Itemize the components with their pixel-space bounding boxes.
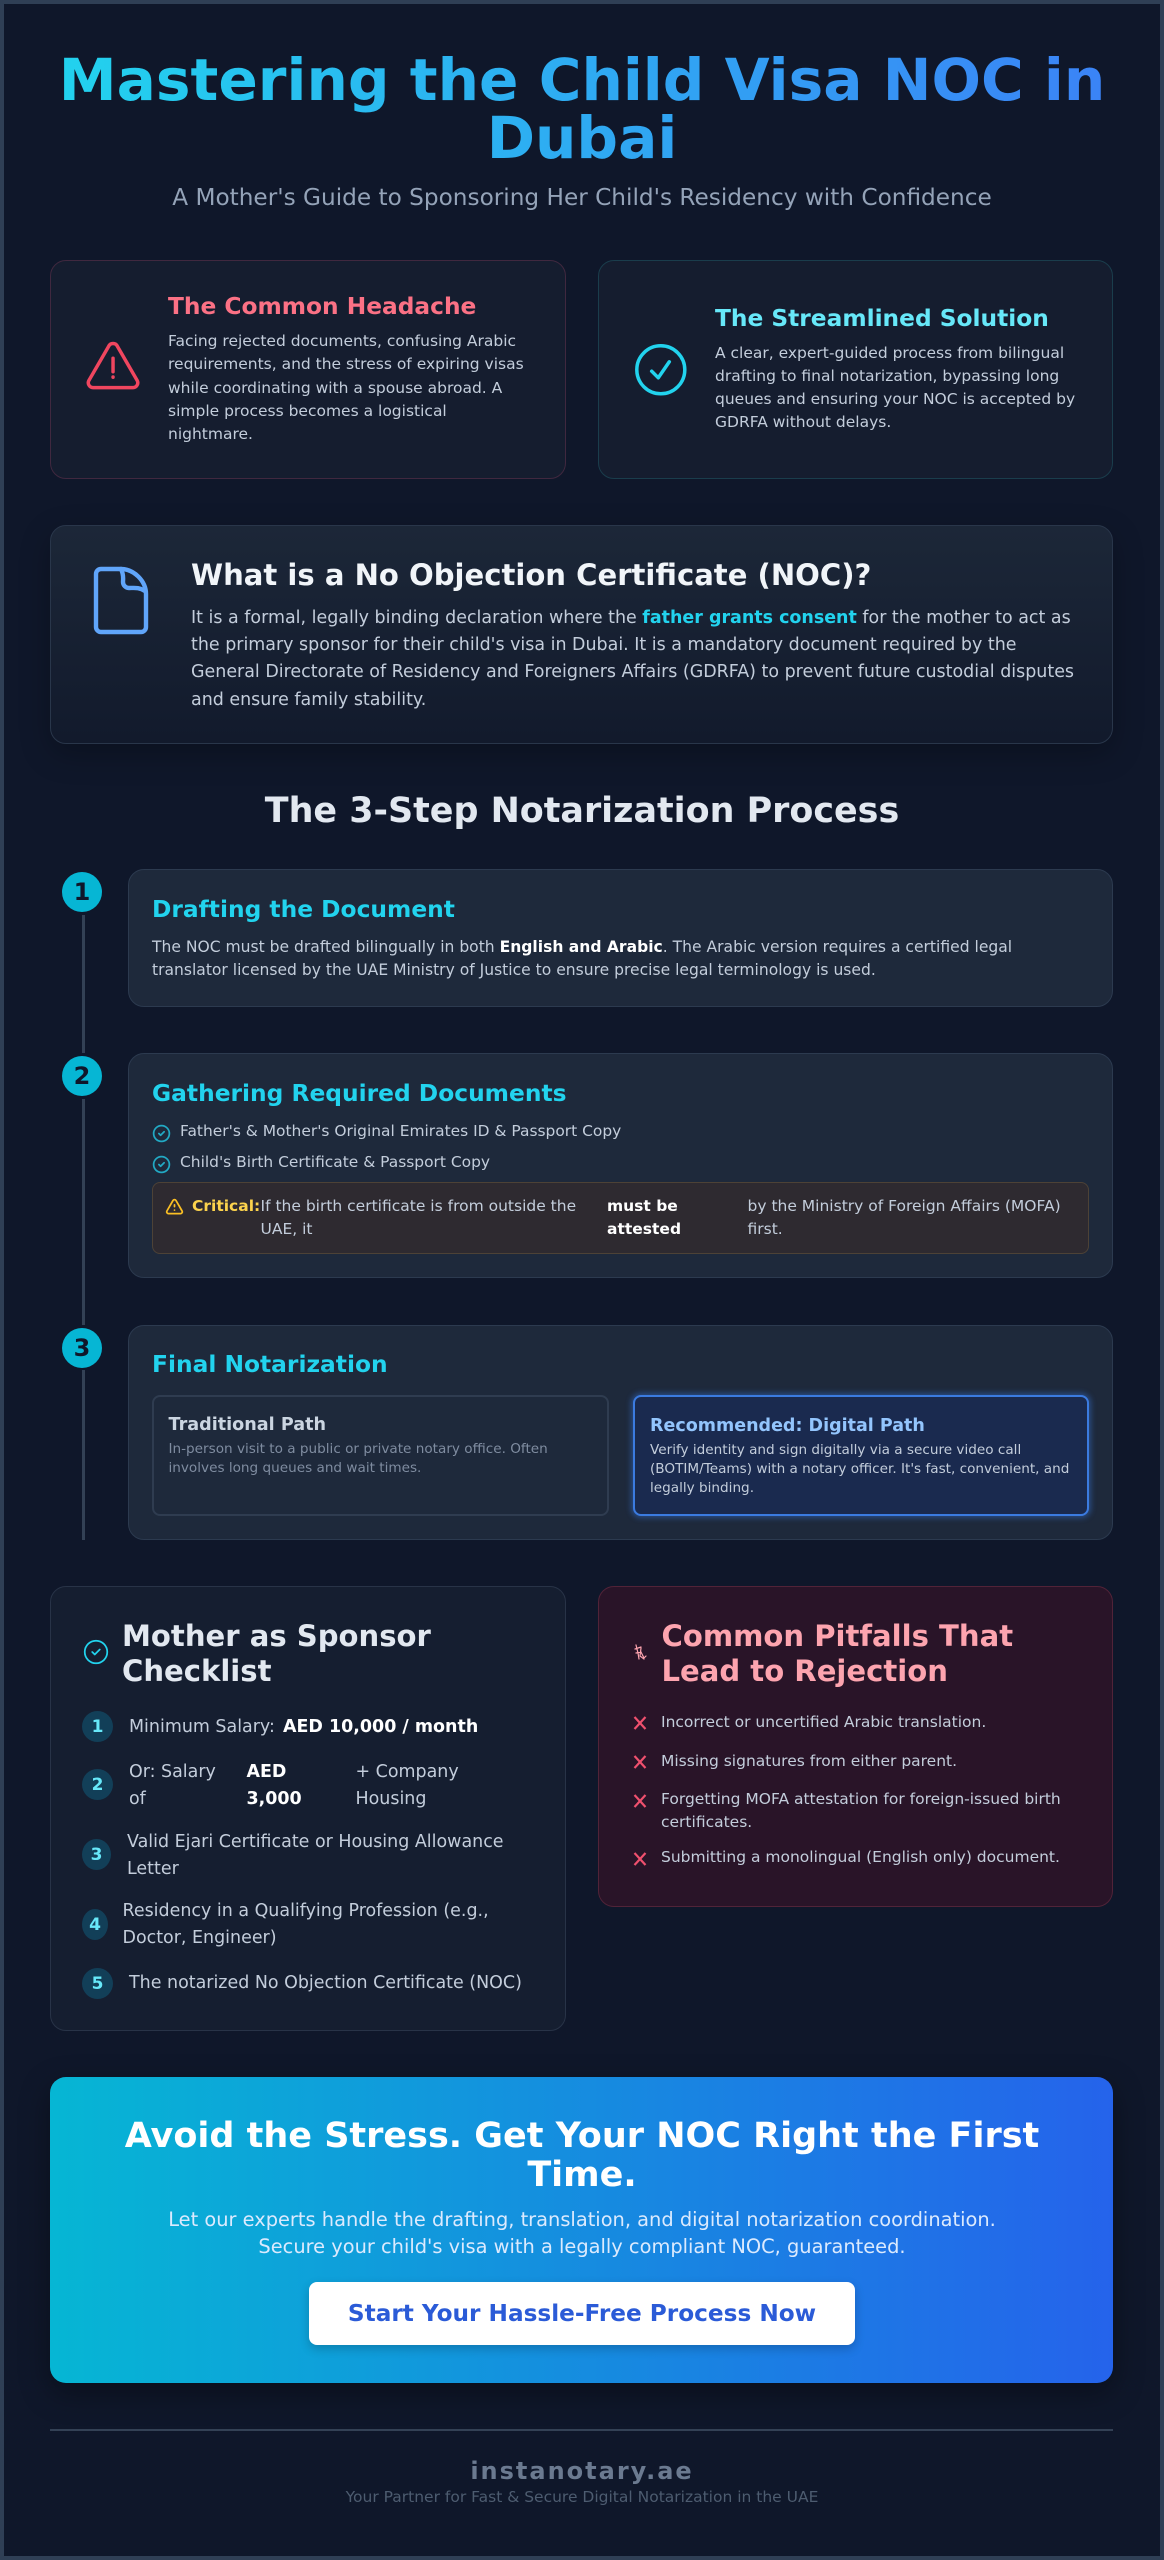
checklist item 4 (82, 1900, 489, 1948)
critical text part 1 (260, 1196, 576, 1238)
solution text: drafting to final notarization, bypassing long (715, 367, 1059, 385)
traditional heading: Traditional Path (168, 1415, 326, 1435)
checklist item 2: + Company (356, 1762, 459, 1782)
timeline line (82, 1370, 85, 1540)
step 2 number: 2 (74, 1062, 90, 1090)
CTA button (309, 2282, 855, 2345)
solution text: queues and ensuring your NOC is accepted by (715, 390, 1075, 408)
panel: digital path (633, 1395, 1089, 1516)
digital text (650, 1442, 1069, 1496)
critical text part 2 (607, 1196, 681, 1238)
checklist heading: Checklist (122, 1654, 271, 1688)
icon: check 2 (152, 1156, 170, 1174)
checklist item 3: Valid Ejari Certificate or Housing Allowance (127, 1832, 504, 1852)
CTA text: Let our experts handle the drafting, translation, and digital notarization coordination. (168, 2208, 996, 2230)
icon: warning triangle (86, 342, 140, 390)
CTA button: Start Your Hassle-Free Process Now (348, 2300, 816, 2327)
timeline line (82, 915, 85, 1053)
checklist item 2 (82, 1762, 459, 1808)
step 2 number (62, 1056, 102, 1096)
panel: common headache (50, 260, 566, 479)
checklist item 2: Or: Salary (129, 1762, 216, 1782)
pitfall 1: Incorrect or uncertified Arabic translation. (661, 1713, 986, 1731)
checklist heading: Mother as Sponsor (122, 1619, 431, 1653)
pitfall 3 (634, 1790, 1061, 1831)
pitfalls heading (662, 1619, 1013, 1688)
panel: streamlined solution (598, 260, 1113, 479)
solution text: GDRFA without delays. (715, 413, 891, 431)
critical text part 1: If the birth certificate is from outside the (260, 1196, 576, 1214)
footer brand: instanotary.ae (470, 2457, 694, 2485)
checklist item 2: 3,000 (246, 1788, 302, 1808)
checklist heading (122, 1619, 431, 1688)
NOC text: the primary sponsor for their child's visa in Dubai. It is a mandatory document required by the (191, 635, 1017, 655)
traditional text: involves long queues and wait times. (168, 1460, 421, 1476)
solution text: A clear, expert-guided process from bilingual (715, 344, 1064, 362)
headache heading: The Common Headache (168, 293, 476, 320)
checklist item 3 (82, 1832, 504, 1878)
digital text: Verify identity and sign digitally via a secure video call (650, 1442, 1021, 1458)
CTA text (168, 2208, 996, 2258)
checklist item 5 (82, 1968, 522, 1999)
checklist item 5: The notarized No Objection Certificate (NOC) (129, 1972, 522, 1992)
panel: checklist (50, 1586, 566, 2031)
CTA text: Secure your child's visa with a legally compliant NOC, guaranteed. (258, 2234, 906, 2258)
critical text part 2: attested (607, 1220, 681, 1238)
CTA heading: Avoid the Stress. Get Your NOC Right the First (125, 2116, 1039, 2156)
digital text: (BOTIM/Teams) with a notary officer. It's fast, convenient, and (650, 1460, 1069, 1476)
step 1 text: The NOC must be drafted bilingually in both English and Arabic. The Arabic version requires a certified legal (152, 938, 1012, 956)
footer divider (50, 2429, 1113, 2431)
pitfalls heading: Common Pitfalls That (662, 1619, 1013, 1653)
icon: checklist check (84, 1640, 108, 1664)
step 1 text: translator licensed by the UAE Ministry of Justice to ensure precise legal terminology is used. (152, 961, 876, 979)
pitfall 2: Missing signatures from either parent. (661, 1752, 957, 1770)
panel: step 1 (128, 869, 1113, 1007)
checklist item 1: AED 10,000 / month (283, 1716, 478, 1736)
critical text part 3: by the Ministry of Foreign Affairs (MOFA) (748, 1196, 1061, 1214)
step 3 number (62, 1328, 102, 1368)
footer tagline: Your Partner for Fast & Secure Digital Notarization in the UAE (346, 2488, 818, 2506)
headache text: simple process becomes a logistical (168, 402, 447, 420)
step 1 number (62, 872, 102, 912)
checklist item 1: Minimum Salary: (129, 1716, 275, 1736)
checklist item 4: Residency in a Qualifying Profession (e.g., (122, 1900, 489, 1920)
traditional text: In-person visit to a public or private notary office. Often (168, 1440, 548, 1456)
title: Mastering the Child Visa NOC in (59, 46, 1105, 114)
critical text part 2: must be (607, 1196, 678, 1214)
headache text: nightmare. (168, 425, 253, 443)
NOC text: It is a formal, legally binding declaration where the father grants consent for the mother to act as (191, 608, 1071, 628)
checklist item 2: AED (246, 1762, 286, 1782)
NOC text (191, 608, 1074, 710)
checklist item 5: 5 (92, 1974, 103, 1994)
NOC text: and ensure family stability. (191, 690, 426, 710)
panel: what is NOC (50, 525, 1113, 744)
panel: call to action (50, 2077, 1113, 2383)
checklist item 1: 1 (92, 1716, 103, 1736)
pitfall 3: Forgetting MOFA attestation for foreign-issued birth (661, 1790, 1061, 1808)
title (0, 51, 1164, 167)
timeline line (82, 1099, 85, 1325)
CTA heading: Time. (527, 2154, 637, 2194)
solution heading: The Streamlined Solution (715, 305, 1049, 332)
critical label: Critical: (192, 1196, 260, 1214)
critical text part 3 (748, 1196, 1061, 1238)
headache text (168, 332, 524, 443)
headache text: while coordinating with a spouse abroad. A (168, 379, 502, 397)
panel: step 2 (128, 1053, 1113, 1278)
panel: pitfalls (598, 1586, 1113, 1907)
digital heading: Recommended: Digital Path (650, 1416, 925, 1436)
icon: document (94, 566, 148, 634)
headache text: Facing rejected documents, confusing Arabic (168, 332, 516, 350)
icon: small warning (166, 1198, 184, 1214)
icon: pitfalls squiggle (634, 1644, 647, 1660)
CTA heading (125, 2116, 1039, 2194)
section heading: The 3-Step Notarization Process (265, 791, 899, 831)
icon: check circle (635, 344, 687, 396)
checklist item 4: Doctor, Engineer) (122, 1928, 277, 1948)
document item 2: Child's Birth Certificate & Passport Copy (180, 1153, 490, 1171)
NOC heading: What is a No Objection Certificate (NOC)? (191, 558, 871, 592)
step 3 heading: Final Notarization (152, 1350, 388, 1378)
step 1 number: 1 (74, 878, 90, 906)
solution text (715, 344, 1075, 431)
icon: check 1 (152, 1124, 170, 1142)
checklist item 2: of (129, 1788, 146, 1808)
panel: traditional path (152, 1395, 609, 1516)
NOC text: General Directorate of Residency and Foreigners Affairs (GDRFA) to prevent future custodial disputes (191, 662, 1074, 682)
panel: step 3 (128, 1325, 1113, 1540)
step 2 heading: Gathering Required Documents (152, 1078, 567, 1106)
step 3 number: 3 (74, 1334, 90, 1362)
pitfall 4: Submitting a monolingual (English only) document. (661, 1848, 1060, 1866)
traditional text (168, 1440, 548, 1476)
digital text: legally binding. (650, 1480, 754, 1496)
critical text part 3: first. (748, 1220, 783, 1238)
document item 1: Father's & Mother's Original Emirates ID & Passport Copy (180, 1122, 621, 1140)
headache text: requirements, and the stress of expiring visas (168, 355, 524, 373)
subtitle: A Mother's Guide to Sponsoring Her Child's Residency with Confidence (172, 184, 992, 211)
pitfall 3: certificates. (661, 1813, 752, 1831)
pitfalls heading: Lead to Rejection (662, 1654, 948, 1688)
critical text part 1: UAE, it (260, 1220, 312, 1238)
step 1 text (152, 938, 1012, 979)
checklist item 2: Housing (356, 1788, 426, 1808)
title: Dubai (487, 104, 677, 172)
checklist item 3: Letter (127, 1858, 179, 1878)
checklist item 4: 4 (89, 1914, 101, 1934)
checklist item 2: 2 (92, 1774, 103, 1794)
step 1 heading: Drafting the Document (152, 894, 455, 922)
checklist item 3: 3 (91, 1844, 102, 1864)
callout: critical (152, 1182, 1089, 1254)
checklist item 1 (82, 1711, 478, 1742)
